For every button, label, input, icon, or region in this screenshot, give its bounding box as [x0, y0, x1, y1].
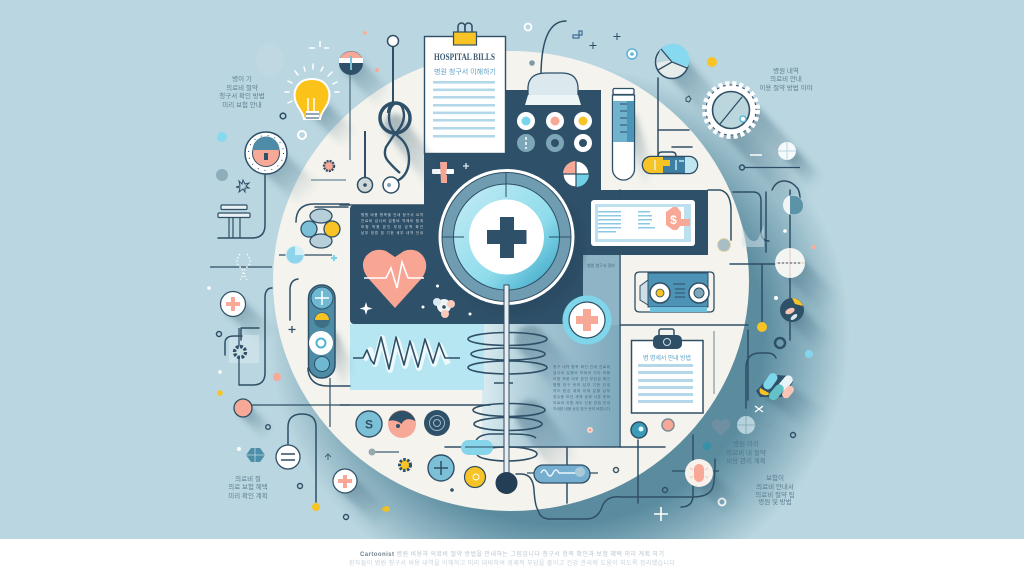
heading: HOSPITAL BILLS: HOSPITAL BILLS [434, 53, 495, 63]
small nodes [344, 427, 668, 520]
connector lines inside circle [290, 78, 748, 503]
icon: plus circle left [220, 292, 270, 338]
icon: pill cluster [301, 209, 340, 248]
line and faint dotted helix [210, 254, 272, 280]
caption line two: 환자들이 병원 청구서 비용 내역을 이해하고 미리 대비하여 경제적 부담을 줄이고 건강 관리에 도움이 되도록 정리했습니다 [349, 559, 675, 567]
text block: blue column copy: 카드 현금 계좌 이체 분할 납부 [553, 388, 611, 393]
icon: top-left badge [339, 51, 385, 160]
main circle [273, 51, 749, 511]
wire from chest piece [516, 459, 715, 519]
text block: top-right note: 의료비 안내 [770, 74, 802, 83]
row icons [356, 410, 450, 438]
chest piece [496, 472, 518, 494]
icon: salmon ball [234, 399, 270, 435]
icon: salmon node [662, 419, 674, 431]
icons: button grid [517, 112, 592, 152]
form rows [638, 364, 693, 403]
panel: dark cross blocks [350, 90, 708, 325]
vertical side mark [713, 331, 715, 394]
footer caption [349, 550, 675, 567]
icon: white plus bottom [654, 507, 668, 521]
document: Hospital Bills [424, 23, 506, 154]
chest piece [383, 177, 399, 193]
marks top [309, 41, 329, 48]
text block: blue column copy: 병원 창구 문의 납부 기한 안내 [553, 382, 610, 387]
text block: dark panel copy: 병원 비용 항목별 안내 청구서 요약 [361, 212, 423, 217]
icon: target dial [775, 248, 830, 305]
icon: gear wheel [704, 84, 810, 195]
card: payment slip [591, 200, 695, 246]
connector from capsule [329, 378, 331, 427]
small plus mark [288, 326, 296, 333]
text block: lower-right note two: 의료비 안내서 [756, 482, 794, 491]
capsule gauge [527, 465, 598, 483]
icon: ball node [631, 422, 647, 438]
text block: bottom-left note [228, 474, 268, 500]
faint shape on right [742, 225, 764, 247]
text block: lower-right note two: 보험이 [766, 473, 784, 482]
text block: blue column copy: 검사비 입원비 약제비 기타 비용 [553, 370, 611, 375]
plus sign [487, 217, 526, 258]
icon: dome device [525, 21, 581, 105]
ECG trace [353, 337, 460, 369]
icon: plus circle [428, 455, 454, 481]
icon: gear on tile [225, 288, 272, 385]
icon: pill capsule device [642, 152, 698, 174]
left side dots [216, 113, 346, 192]
footer band [0, 539, 1024, 585]
caption line one: Cartoonist 병원 비용과 의료비 절약 방법을 안내하는 그림입니다 청구서 항목 확인과 보험 혜택 미리 계획 하기 [360, 550, 664, 558]
icon: equals circle with wire [276, 414, 320, 511]
document sheet [424, 36, 506, 154]
text block: blue column copy: 영수증 보관 세액 공제 서류 준비 [553, 394, 610, 399]
icon: traffic capsule [308, 285, 350, 380]
rays [285, 64, 339, 103]
text block: top-left note: 의료비 절약 [226, 83, 258, 92]
text block: bottom-left note: 의료 보험 혜택 [228, 482, 268, 491]
tube loop [380, 103, 410, 133]
panel: ECG [350, 324, 484, 390]
icon: hex capsule [246, 448, 265, 462]
icon: quadrant chart [563, 161, 589, 187]
icon: stethoscope [358, 36, 440, 193]
small ring on connector [718, 238, 730, 252]
central magnifier lens [438, 169, 584, 315]
icon: swirl badge [424, 410, 450, 436]
clip [454, 23, 476, 45]
text block: lower-right note two: 병원 및 방법 [758, 497, 792, 506]
text block: top-left note: 미리 보험 안내 [222, 100, 262, 109]
flower icon [433, 298, 455, 318]
text block: top-right note: 병원 내역 [773, 66, 799, 75]
ECG glow [364, 338, 448, 370]
icon: pill ball [780, 298, 825, 345]
text block: blue column copy: 보험 적용 여부 본인 부담금 확인 [553, 376, 610, 381]
text block: top-left note: 청구서 확인 방법 [219, 91, 265, 100]
right wiring [730, 181, 800, 400]
icon: glass ball on line [279, 246, 337, 264]
track connector [252, 404, 350, 406]
faint globe [256, 43, 284, 77]
icon: small plus on dark block [432, 162, 469, 183]
text block: dark panel copy [361, 212, 423, 235]
pill pointer [461, 440, 499, 455]
main circle shadow [270, 65, 850, 585]
icon: half sphere [783, 195, 803, 215]
icon: light bulb [285, 64, 350, 140]
text block: bottom-left note: 미리 확인 계획 [228, 491, 268, 500]
icon: pills pile [746, 353, 815, 420]
text block: top-left note: 병이 기 [232, 74, 252, 83]
faint heart and disc [712, 416, 773, 436]
text block: blue column copy: 의료비 지원 제도 신청 방법 안내 [553, 400, 610, 405]
document rows [433, 81, 495, 138]
icon: test tube [612, 88, 650, 180]
earpiece [388, 36, 398, 46]
text block: lower-right note one: 병원 미리 [733, 439, 759, 448]
subtitle: 병원 청구서 이해하기 [434, 67, 496, 76]
icon: bottom-right capsule badge [672, 435, 735, 510]
text block: dark panel copy: 진료비 검사비 입원비 약제비 합계 [361, 218, 423, 223]
clip [653, 329, 682, 349]
icon: gear small [400, 460, 410, 470]
top center marks [363, 24, 717, 72]
text block: blue column copy: 청구 내역 항목 확인 안내 진료비 [553, 364, 610, 369]
slider right [740, 155, 800, 170]
icon: heart [360, 250, 472, 318]
central stethoscope: coils [468, 332, 570, 470]
small left dots [207, 286, 331, 488]
text block: top-left note [219, 74, 265, 109]
right dots [703, 229, 815, 505]
text block: lower-right note one: 의료비 내 절약 [726, 448, 766, 457]
sparkles [360, 302, 372, 315]
text block: bottom-left note: 의료비 절 [235, 474, 261, 483]
icon: plus badge [562, 296, 612, 344]
text block: lower-right note one [726, 439, 766, 465]
icon: small cluster [686, 96, 691, 102]
small scope [364, 131, 366, 177]
icon: face badge [388, 410, 416, 438]
connector: dial to stool [218, 175, 265, 238]
icon: pie chart [656, 44, 720, 115]
text block: top-right note [759, 66, 813, 92]
text block: dark panel copy: 보험 적용 본인 부담 금액 확인 [361, 224, 423, 229]
text block: lower-right note two [755, 473, 795, 506]
text block: dark panel copy: 납부 방법 및 기한 세부 내역 안내 [361, 230, 423, 235]
text block: lower-right note two: 의료비 절약 팁 [755, 490, 795, 499]
slider [368, 448, 399, 456]
text block: blue column copy [553, 364, 611, 411]
sheet [632, 340, 703, 413]
form title: 병 명세서 안내 방법 [643, 354, 691, 362]
panel: blue-gray info block [482, 255, 619, 447]
price tag: $ [670, 213, 677, 227]
icon: yellow coin [464, 466, 486, 488]
text block: top-right note: 이용 절약 방법 이야 [759, 83, 813, 92]
device: scanner [635, 272, 714, 312]
text block: blue column copy: 자세한 내용 상담 창구 문의 바랍니다 [553, 406, 611, 411]
central stem [496, 285, 518, 494]
icon: plus circle bottom [333, 469, 385, 520]
icon: S badge: S [365, 418, 373, 432]
icon: cross dial [778, 142, 815, 180]
clipboard: form [632, 329, 703, 413]
text block: small header in blue-gray column: 병원 청구서 정보 [587, 262, 615, 268]
icon: dial with face [245, 132, 310, 195]
icon: stool [218, 205, 250, 238]
text block: lower-right note one: 비용 관리 계획 [726, 456, 766, 465]
